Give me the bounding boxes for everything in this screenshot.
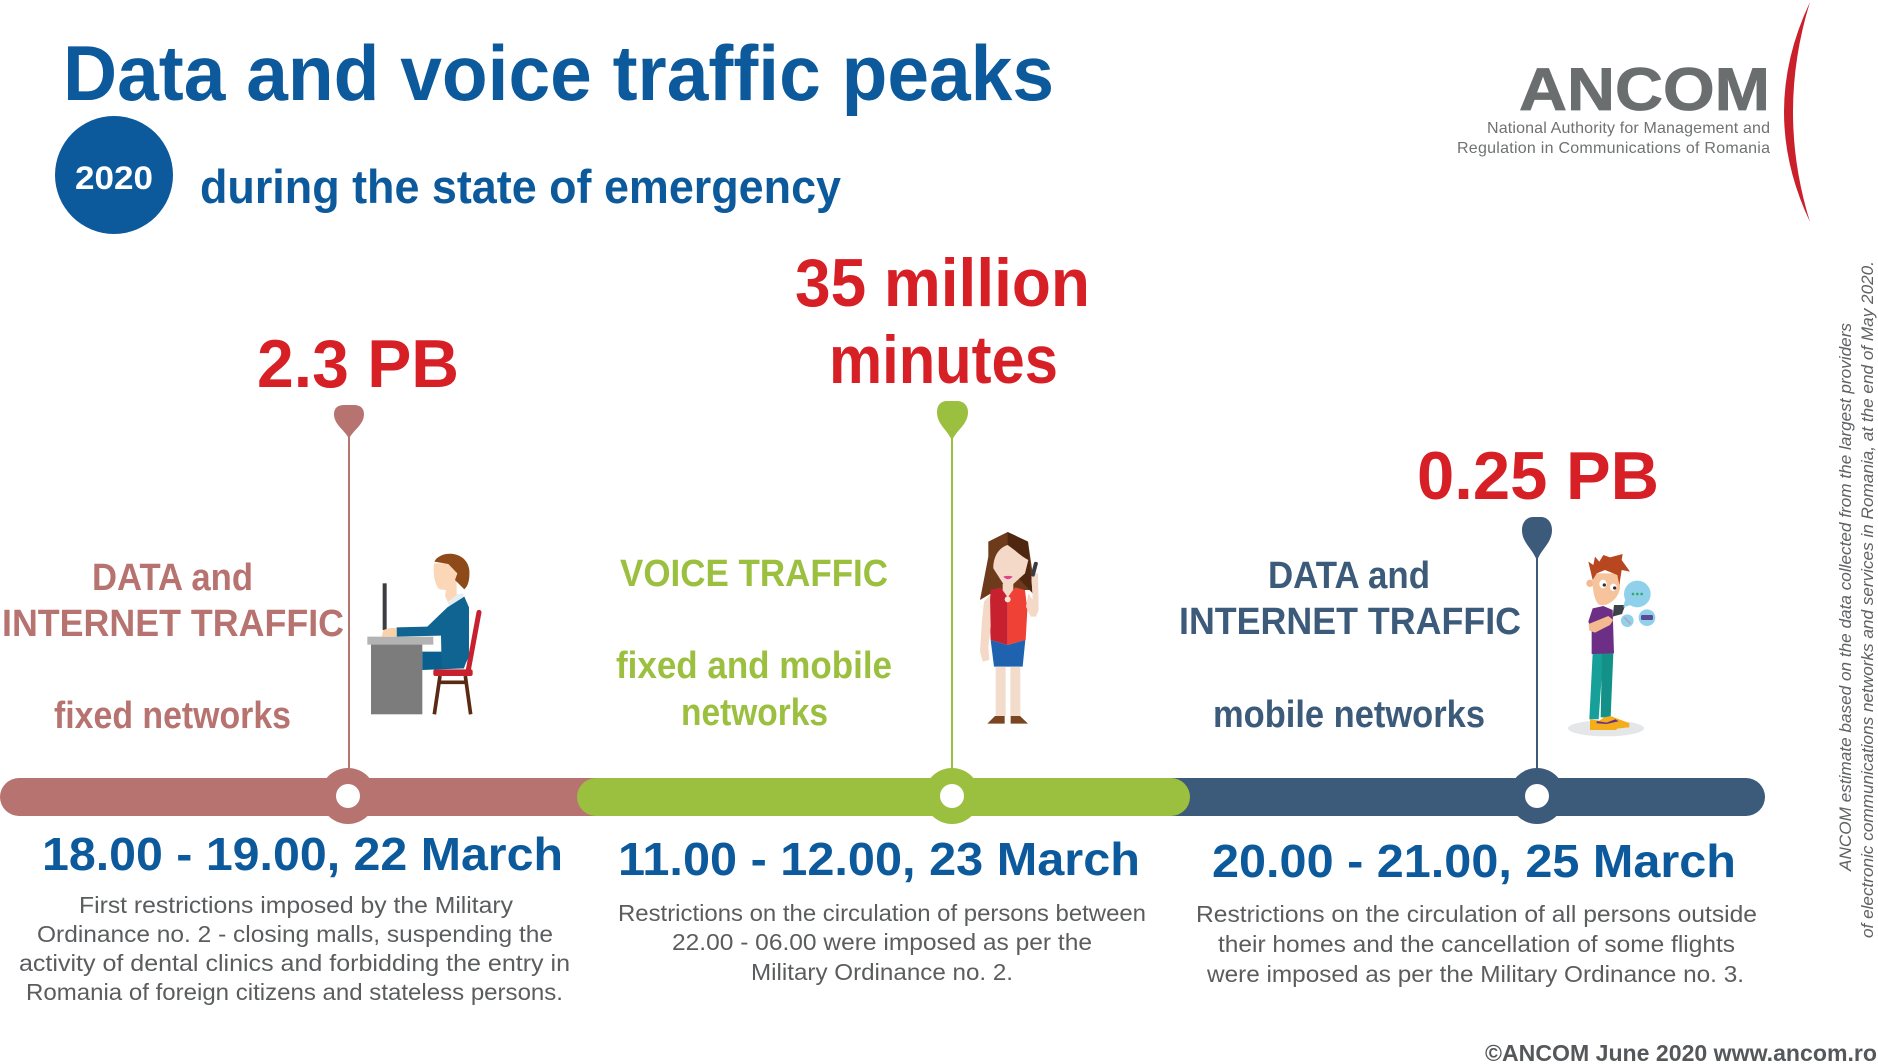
description: 22 March: activity of dental clinics and forbidding the entry in: [19, 950, 570, 976]
logo: ANCOM: National Authority for Management and: [1487, 120, 1770, 137]
timeline bar: [0, 768, 1765, 824]
value: 35 million minutes: [795, 245, 1090, 398]
description: 25 March: their homes and the cancellation of some flights: [1218, 931, 1735, 957]
description: 25 March: Restrictions on the circulation of all persons outside: [1196, 901, 1757, 927]
label: fixed data traffic: fixed networks: [54, 695, 291, 737]
description: 25 March: were imposed as per the Military Ordinance no. 3.: [1206, 961, 1744, 987]
label: voice traffic: [616, 553, 892, 734]
description: 23 March: 22.00 - 06.00 were imposed as per the: [672, 929, 1092, 955]
value: 35 million minutes: minutes: [829, 322, 1058, 398]
pin: voice: [937, 401, 968, 772]
label: voice traffic: fixed and mobile: [616, 645, 892, 687]
description: 22 March: Romania of foreign citizens and stateless persons.: [26, 979, 563, 1005]
value: 0.25 PB: 0.25 PB: [1417, 438, 1659, 514]
icon: woman on phone: [980, 532, 1039, 724]
icon: boy with smartphone: [1568, 554, 1655, 736]
label: mobile data traffic: INTERNET TRAFFIC: [1179, 601, 1521, 643]
label: mobile data traffic: [1179, 555, 1521, 736]
source note: ANCOM estimate based on the data collected from the largest providers: [1836, 322, 1855, 872]
value: 2.3 PB: 2.3 PB: [257, 326, 459, 402]
description: 23 March: [618, 900, 1146, 985]
label: fixed data traffic: DATA and: [92, 557, 253, 599]
date: 22 March: 18.00 - 19.00, 22 March: [42, 828, 563, 880]
icon: man at desk: [367, 554, 479, 714]
description: 23 March: Restrictions on the circulation of persons between: [618, 900, 1146, 926]
date: 25 March: 20.00 - 21.00, 25 March: [1212, 835, 1736, 887]
date: 23 March: 11.00 - 12.00, 23 March: [618, 833, 1140, 885]
description: 22 March: Ordinance no. 2 - closing malls, suspending the: [37, 921, 553, 947]
source note: of electronic communications networks and services in Romania, at the end of May 2020.: [1858, 261, 1877, 938]
label: voice traffic: VOICE TRAFFIC: [620, 553, 888, 595]
label: fixed data traffic: [2, 557, 344, 737]
year badge: [55, 116, 173, 234]
label: mobile data traffic: DATA and: [1268, 555, 1430, 597]
pin: fixed data: [334, 405, 364, 772]
year badge: 2020: [75, 160, 153, 196]
pin: mobile data: [1522, 517, 1552, 772]
value: 35 million minutes: 35 million: [795, 245, 1090, 321]
source note: [1836, 261, 1877, 938]
description: 23 March: Military Ordinance no. 2.: [751, 959, 1013, 985]
label: mobile data traffic: mobile networks: [1213, 694, 1485, 736]
logo: ANCOM: [1457, 2, 1810, 222]
title: Data and voice traffic peaks: [63, 29, 1054, 117]
label: fixed data traffic: INTERNET TRAFFIC: [2, 603, 344, 645]
label: voice traffic: networks: [681, 692, 828, 734]
logo: ANCOM: ANCOM: [1519, 56, 1770, 123]
subtitle: during the state of emergency: [200, 160, 841, 213]
logo: ANCOM: Regulation in Communications of Romania: [1457, 140, 1770, 157]
description: 25 March: [1196, 901, 1757, 987]
description: 22 March: [19, 892, 570, 1005]
description: 22 March: First restrictions imposed by the Military: [79, 892, 514, 918]
